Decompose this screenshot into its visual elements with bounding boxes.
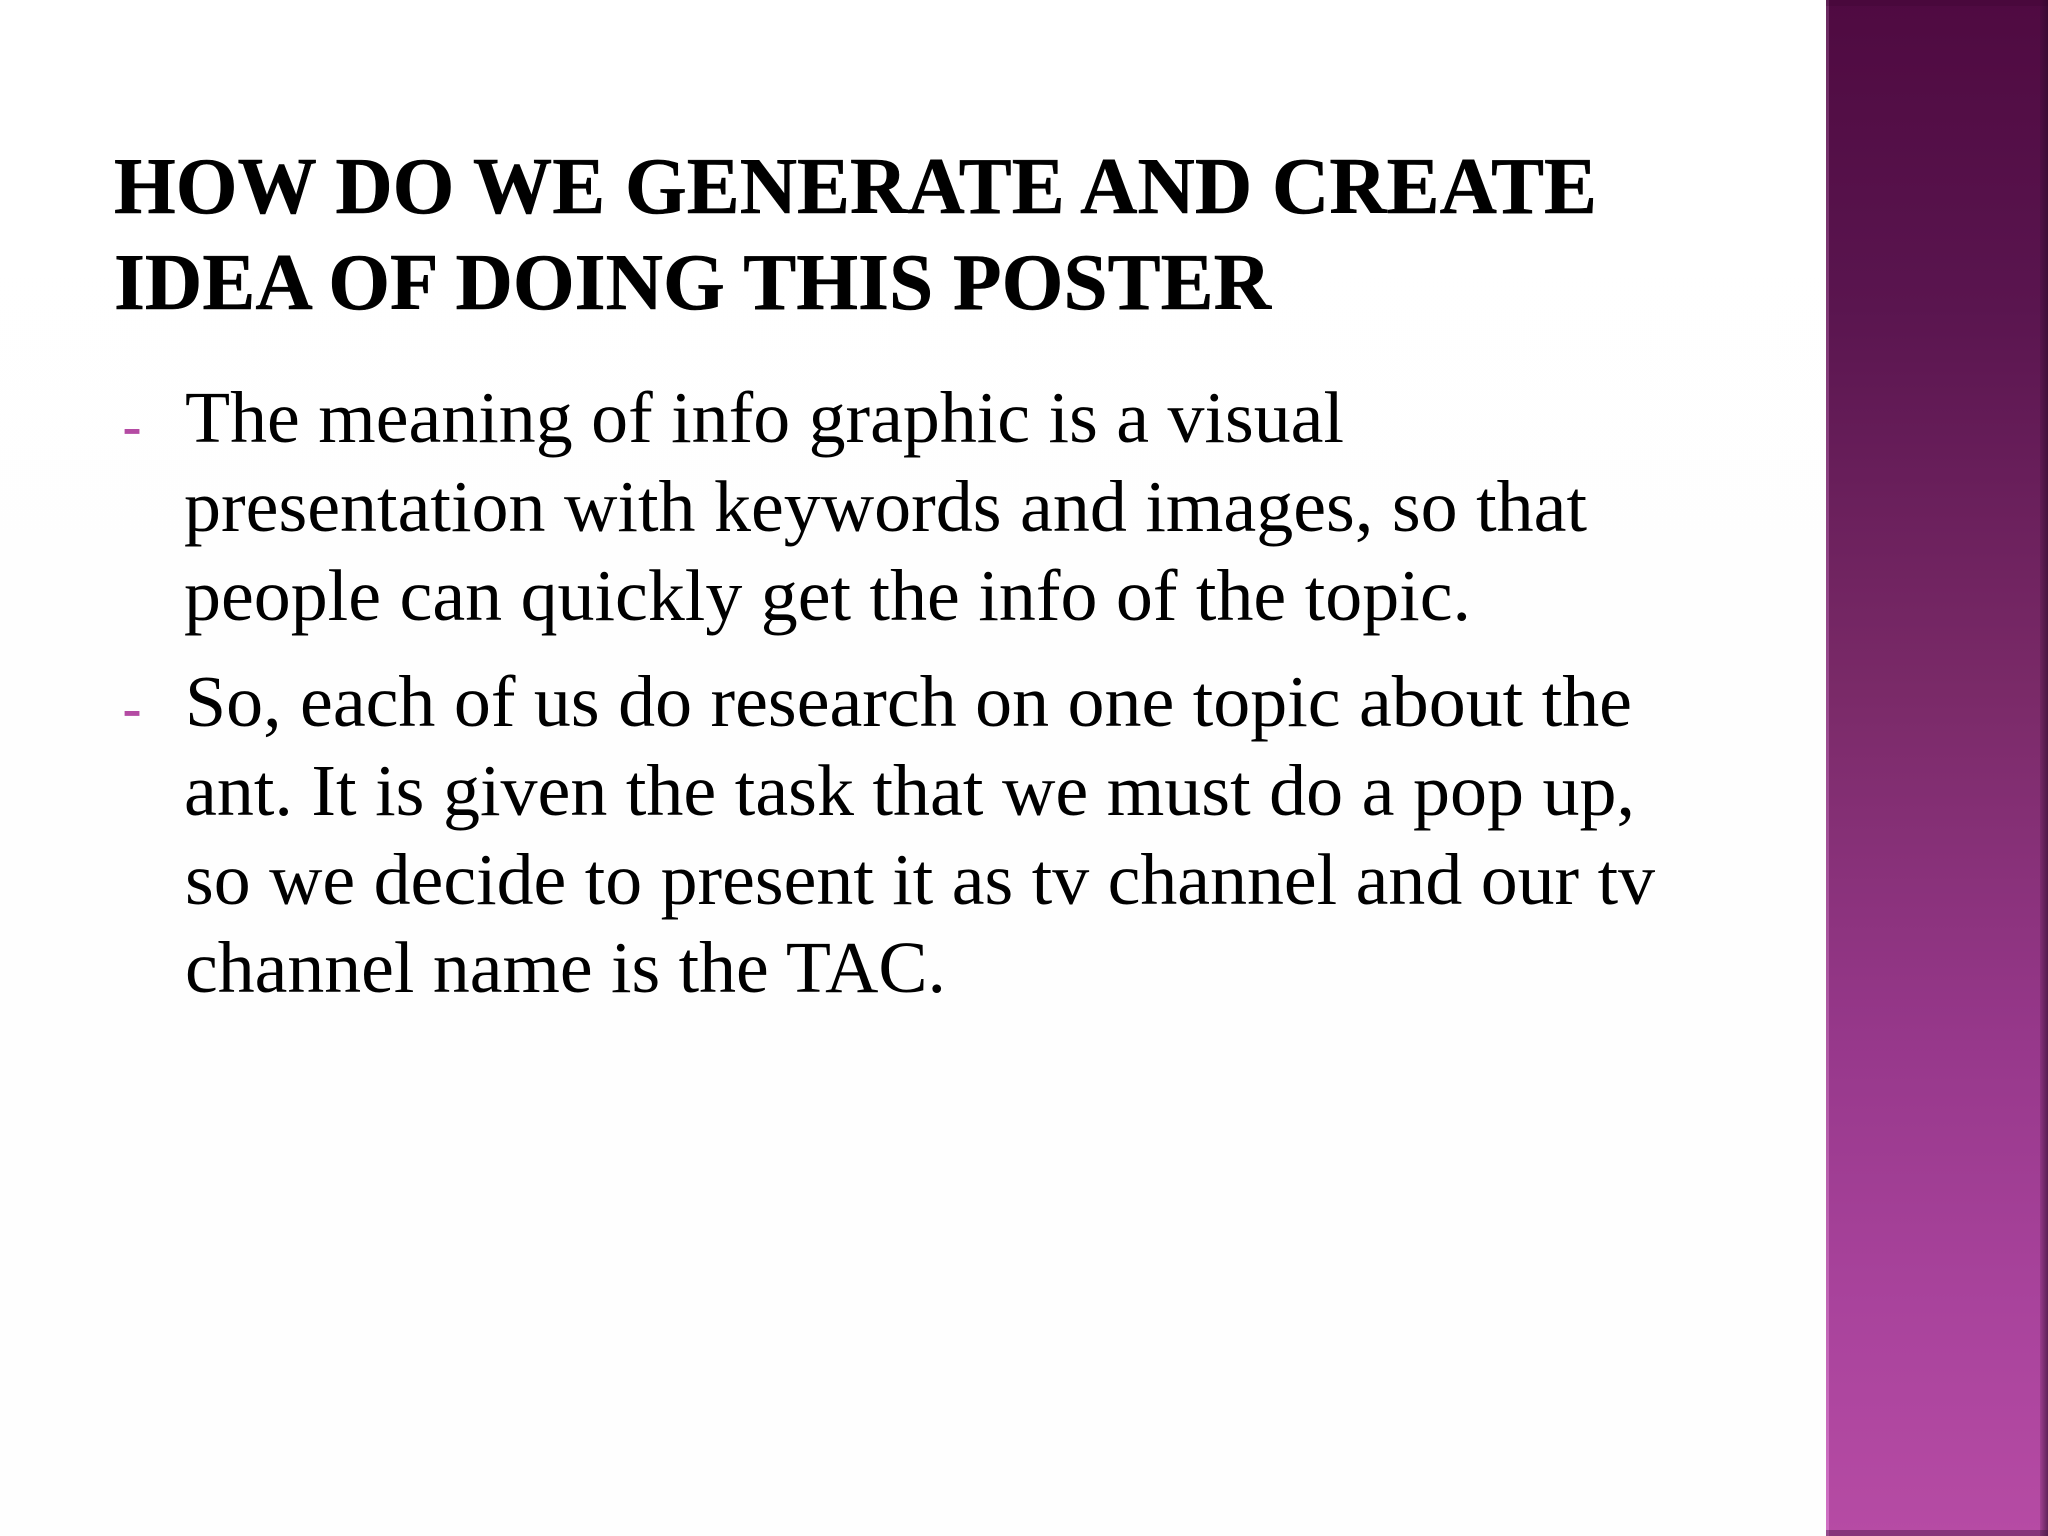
- title: [114, 143, 1597, 327]
- title: HOW DO WE GENERATE AND CREATE: [114, 143, 1597, 231]
- text block: research task and TAC channel: so we decide to present it as tv channel and our tv: [185, 839, 1655, 920]
- bullet marker: first paragraph dash: -: [123, 396, 141, 456]
- text block: meaning of infographic: people can quickly get the info of the topic.: [184, 555, 1471, 636]
- bullet marker: second paragraph dash: -: [123, 678, 141, 738]
- text block: research task and TAC channel: So, each of us do research on one topic about the: [185, 661, 1632, 742]
- text block: research task and TAC channel: ant. It is given the task that we must do a pop up,: [184, 750, 1635, 831]
- text block: meaning of infographic: The meaning of info graphic is a visual: [185, 377, 1344, 458]
- panel: purple gradient sidebar: [1826, 0, 2048, 1536]
- text block: meaning of infographic: presentation with keywords and images, so that: [184, 466, 1587, 547]
- text block: research task and TAC channel: [184, 661, 1655, 1008]
- text block: research task and TAC channel: channel name is the TAC.: [185, 927, 946, 1008]
- title: IDEA OF DOING THIS POSTER: [114, 239, 1272, 327]
- text block: meaning of infographic: [184, 377, 1587, 636]
